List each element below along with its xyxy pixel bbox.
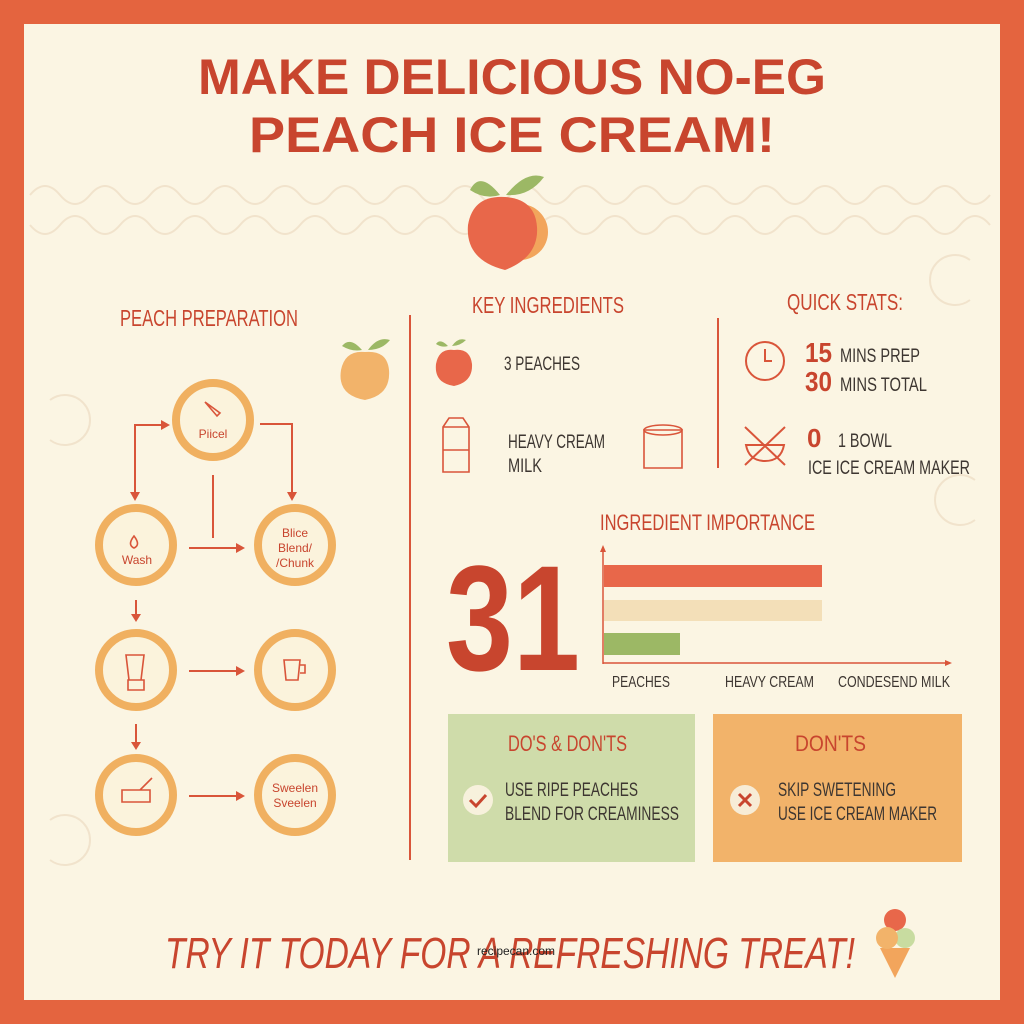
panel: dos: BLEND FOR CREAMINESS: [505, 804, 679, 825]
icon: small peach: [340, 339, 390, 400]
panel: dos: DO'S & DON'TS: [508, 731, 627, 756]
ingredients list: [436, 339, 682, 477]
flowchart: Sveelen: [273, 796, 317, 810]
flowchart: Sweelen: [272, 781, 318, 795]
ingredients list: HEAVY CREAM: [508, 432, 605, 453]
panel: donts: [713, 714, 962, 862]
quick stats: 15: [805, 337, 832, 368]
bar chart: PEACHES: [612, 674, 670, 691]
quick stats: ICE ICE CREAM MAKER: [808, 458, 970, 479]
panel: dos: USE RIPE PEACHES: [505, 780, 638, 801]
panel: donts: DON'TS: [795, 731, 866, 756]
dividers: [410, 315, 718, 860]
panel: dos: [448, 714, 695, 862]
quick stats: [745, 337, 970, 479]
bar chart: CONDESEND MILK: [838, 674, 950, 691]
quick stats: MINS TOTAL: [840, 375, 927, 396]
heading: peach preparation: PEACH PREPARATION: [120, 305, 298, 331]
quick stats: 30: [805, 366, 832, 397]
title: PEACH ICE CREAM!: [249, 107, 775, 163]
flowchart: Blice: [282, 526, 308, 540]
watermark: recipecan.com: [477, 944, 555, 958]
flowchart: /Chunk: [276, 556, 315, 570]
icon: main peach: [468, 175, 548, 270]
title: MAKE DELICIOUS NO-EG: [198, 49, 826, 105]
quick stats: 0: [807, 423, 821, 453]
flowchart: Blend/: [278, 541, 313, 555]
ingredients list: 3 PEACHES: [504, 354, 580, 375]
bar chart: HEAVY CREAM: [725, 674, 814, 691]
icon: ice cream: [876, 909, 915, 978]
bar chart: [600, 545, 952, 691]
flowchart: Wash: [122, 553, 152, 567]
heading: quick stats: QUICK STATS:: [787, 289, 903, 315]
panel: donts: USE ICE CREAM MAKER: [778, 804, 937, 825]
flowchart: Piicel: [199, 427, 227, 441]
flowchart: [99, 383, 332, 832]
panel: donts: SKIP SWETENING: [778, 780, 896, 801]
big number 31: 31: [446, 534, 580, 702]
title: [198, 49, 826, 163]
quick stats: MINS PREP: [840, 346, 920, 367]
quick stats: 1 BOWL: [838, 431, 892, 452]
heading: ingredient importance: INGREDIENT IMPORTANCE: [600, 510, 815, 535]
heading: key ingredients: KEY INGREDIENTS: [472, 292, 624, 318]
decorative swirl band: [30, 186, 990, 865]
ingredients list: MILK: [508, 456, 542, 477]
